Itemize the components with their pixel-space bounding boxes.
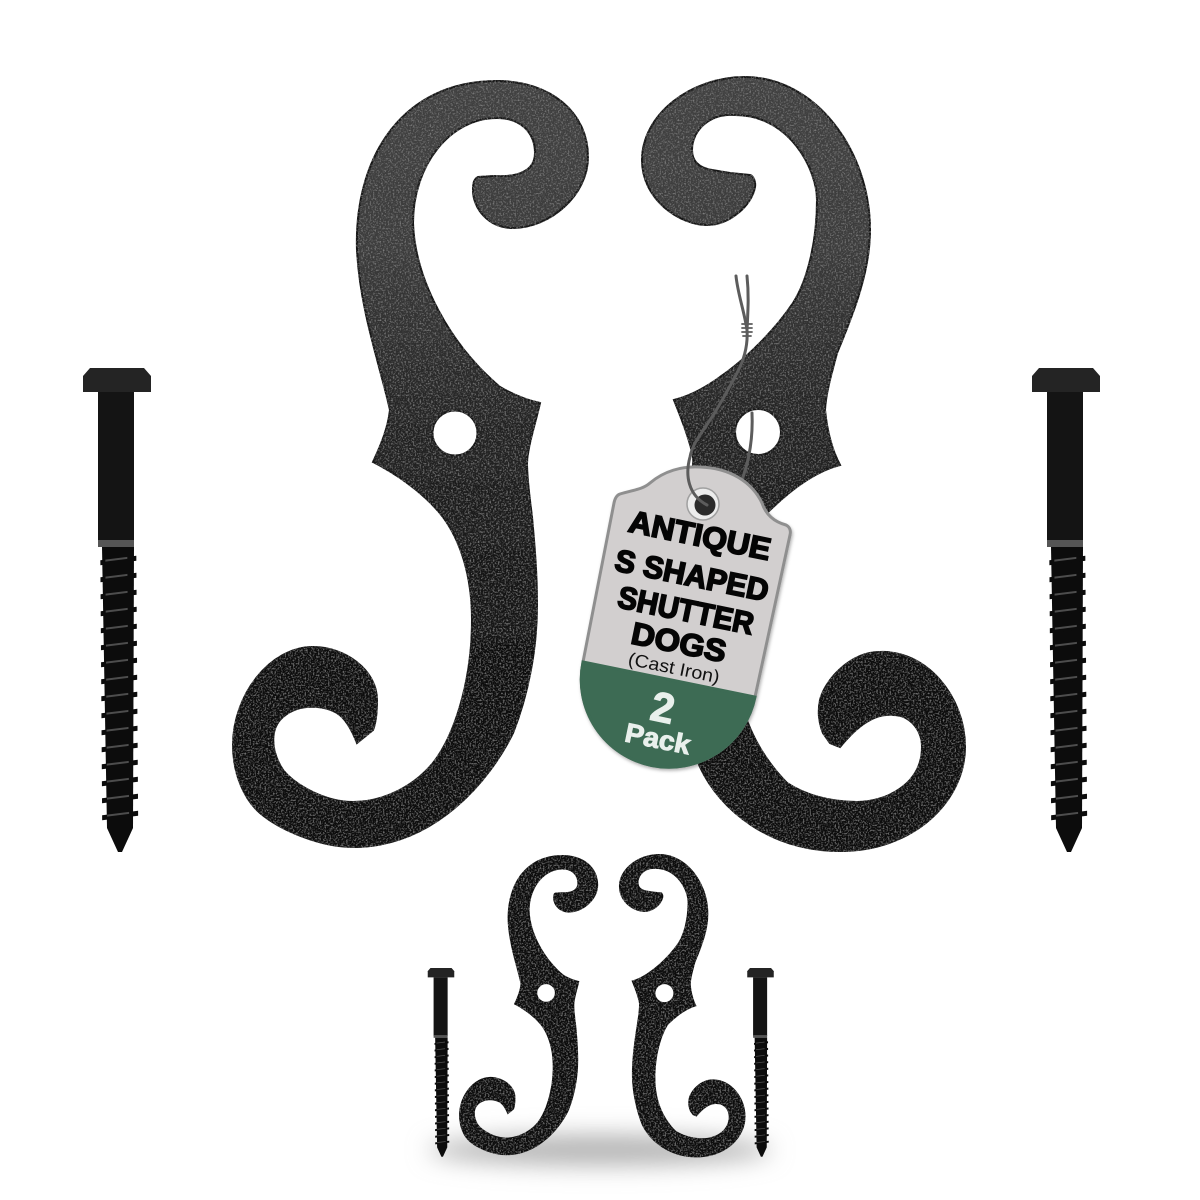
material note: (Cast Iron) [626,649,722,687]
string loop [688,276,752,505]
tag title: S SHAPED [612,543,772,608]
small left lag screw [428,968,454,1157]
hang tag [581,467,790,767]
large left lag screw [83,368,151,852]
tag title [612,504,774,669]
large left S-shaped shutter dog [233,81,588,847]
tag title: DOGS [628,616,729,669]
tag green band [581,662,755,767]
large right S-shaped shutter dog [642,77,965,851]
small left shutter dog [459,855,598,1155]
tag title: SHUTTER [615,579,757,642]
small right shutter dog [619,854,746,1157]
large right lag screw [1032,368,1100,852]
ground shadow under small set [428,1135,772,1165]
pack count: Pack [622,718,694,761]
pack count: 2 [647,682,679,733]
eyelet [687,488,719,520]
string behind tag [741,413,752,482]
tag title: ANTIQUE [626,504,774,567]
pack count [622,682,694,761]
tag body [581,467,790,767]
small right lag screw [747,968,774,1157]
